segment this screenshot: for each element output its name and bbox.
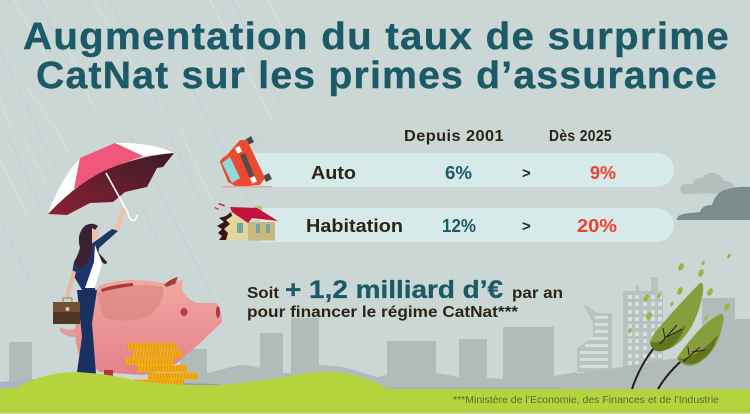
- coins: [125, 343, 198, 386]
- jacket: [72, 229, 118, 290]
- row: Auto values: 6%: [445, 163, 472, 183]
- row: Auto values: >: [522, 165, 531, 182]
- row: Habitation values: 20%: [577, 216, 617, 236]
- callout text: pour financer le régime CatNat***: [247, 304, 519, 321]
- row: Auto values: [311, 163, 616, 183]
- row: Habitation values: >: [522, 218, 531, 235]
- row: Habitation values: [306, 216, 617, 236]
- rain: [0, 0, 294, 293]
- row: Habitation values: 12%: [442, 216, 476, 236]
- column headers: Dès 2025: [549, 128, 612, 145]
- blouse: [85, 245, 102, 288]
- piggy bank: [60, 277, 222, 377]
- trees: [628, 253, 731, 389]
- callout text: [247, 276, 563, 321]
- callout text: Soit: [247, 285, 279, 302]
- skyline: [0, 318, 580, 389]
- callout text: par an: [512, 285, 563, 302]
- title: Augmentation du taux de surprime: [23, 16, 730, 58]
- clouds: [677, 173, 750, 220]
- umbrella: [48, 143, 174, 220]
- title: CatNat sur les primes d’assurance: [36, 55, 718, 97]
- woman: [48, 143, 174, 374]
- column headers: Depuis 2001: [404, 128, 504, 145]
- callout text: + 1,2 milliard d’€: [285, 276, 503, 304]
- row: Auto values: Auto: [311, 163, 356, 183]
- ground: [0, 372, 750, 413]
- hand arm: [65, 270, 76, 298]
- row: Habitation values: Habitation: [306, 216, 403, 236]
- title: [23, 16, 730, 97]
- icon: damaged house: [214, 203, 278, 240]
- icon: overturned car: [220, 136, 272, 188]
- row: Auto values: 9%: [590, 163, 616, 183]
- row background: Auto: [250, 153, 674, 187]
- legs: [77, 290, 97, 374]
- briefcase: [53, 298, 80, 324]
- row background: Habitation: [260, 208, 674, 242]
- footnote: ***Ministère de l’Economie, des Finances et de l’Industrie: [453, 394, 719, 406]
- right city: [560, 277, 750, 389]
- column headers: [404, 128, 612, 145]
- hair: [74, 224, 107, 268]
- data rows: [250, 153, 674, 242]
- arm: [113, 208, 126, 232]
- face: [92, 228, 99, 242]
